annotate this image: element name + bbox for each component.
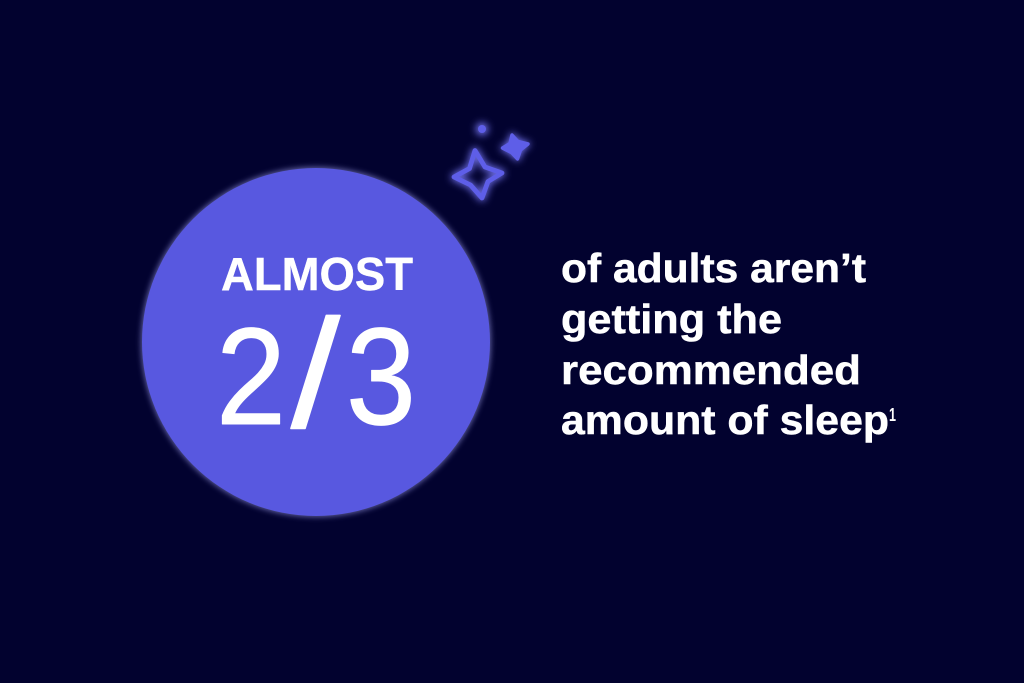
icon: dot	[478, 125, 486, 133]
big number: two thirds: /	[291, 288, 340, 460]
description text: of adults aren’t	[561, 245, 866, 291]
description text: recommended	[561, 347, 861, 393]
footnote marker: 1	[889, 405, 896, 425]
description text	[561, 245, 896, 443]
description text: amount of sleep	[561, 397, 889, 443]
icon: outline star	[454, 150, 502, 198]
big number: two thirds: 2	[216, 300, 286, 454]
icon: filled star	[502, 135, 528, 159]
big number: two thirds: 3	[346, 300, 416, 454]
big number: two thirds	[216, 288, 416, 460]
icon: sparkles	[454, 123, 528, 198]
description text: getting the	[561, 296, 782, 342]
statistic circle	[141, 167, 491, 517]
label: almost: ALMOST	[221, 248, 413, 300]
